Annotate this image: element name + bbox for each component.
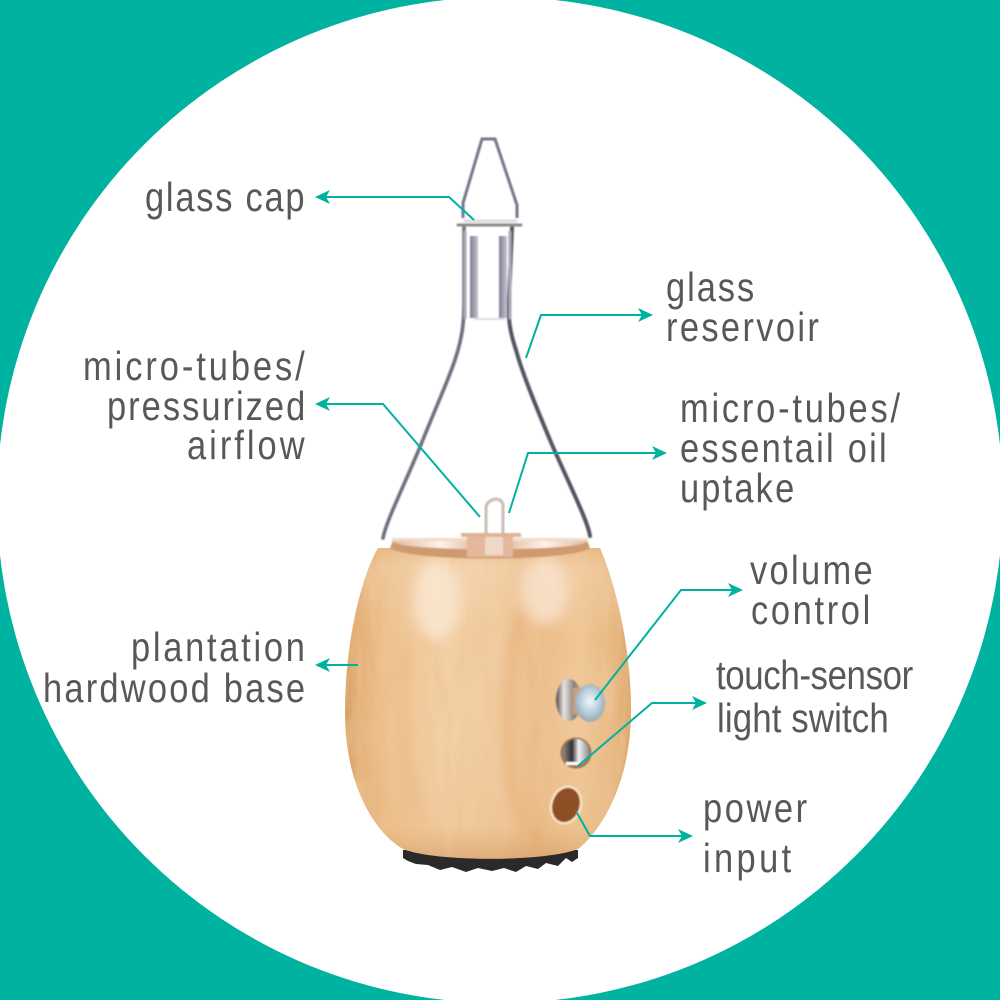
label: volume control: control: [751, 588, 870, 634]
callout: glass reservoir: [526, 265, 819, 358]
label: essential oil uptake: [680, 386, 901, 512]
label: glass reservoir: [666, 265, 819, 351]
touch sensor button: [560, 738, 592, 768]
diffuser product: [340, 139, 640, 872]
power input socket: [545, 781, 587, 829]
label: hardwood base: hardwood base: [43, 666, 305, 712]
leader line: volume control: [595, 583, 743, 700]
leader line: glass cap: [315, 190, 474, 220]
leader line: glass reservoir: [526, 308, 653, 358]
callout: micro-tubes essential oil uptake: [509, 386, 901, 513]
label: touch-sensor light switch: touch-sensor: [716, 653, 914, 699]
callout: volume control: [595, 548, 873, 700]
wooden base: [340, 540, 640, 865]
label: pressurized airflow: airflow: [187, 423, 305, 469]
label: glass reservoir: glass: [666, 265, 754, 311]
glass reservoir: [383, 221, 590, 538]
label: touch-sensor light switch: [716, 653, 914, 742]
label: glass cap: glass cap: [145, 175, 305, 221]
label: volume control: volume: [750, 548, 873, 594]
callout: power input: [577, 786, 807, 882]
black rubber feet: [403, 850, 578, 872]
label: glass reservoir: reservoir: [666, 305, 819, 351]
label: volume control: [750, 548, 873, 634]
glass platform: [390, 533, 590, 558]
label: power input: [703, 786, 807, 882]
wood grain and highlights: [340, 540, 640, 865]
label: essential oil uptake: essentail oil: [680, 426, 887, 472]
label: power input: input: [703, 836, 792, 882]
label: hardwood base: [43, 625, 305, 712]
label: touch-sensor light switch: light switch: [717, 696, 889, 742]
leader line: oil uptake: [509, 446, 667, 513]
callout: plantation hardwood base: [43, 625, 358, 712]
callout: touch-sensor light switch: [578, 653, 914, 766]
label: pressurized airflow: micro-tubes/: [83, 344, 305, 390]
label: essential oil uptake: micro-tubes/: [680, 386, 901, 432]
micro-tube nozzle: [486, 499, 503, 538]
leader line: touch sensor: [578, 696, 707, 766]
leader line: hardwood base: [315, 658, 358, 672]
label: power input: power: [703, 786, 807, 832]
label: pressurized airflow: pressurized: [107, 384, 305, 430]
glass cap: [463, 139, 517, 218]
leader line: pressurized airflow: [315, 397, 480, 517]
label: pressurized airflow: [83, 344, 305, 469]
volume knob: [556, 679, 605, 722]
label: essential oil uptake: uptake: [680, 466, 794, 512]
callout: glass cap: [145, 175, 474, 221]
label: hardwood base: plantation: [131, 625, 305, 671]
leader line: power input: [577, 813, 693, 843]
callout: micro-tubes pressurized airflow: [83, 344, 480, 517]
